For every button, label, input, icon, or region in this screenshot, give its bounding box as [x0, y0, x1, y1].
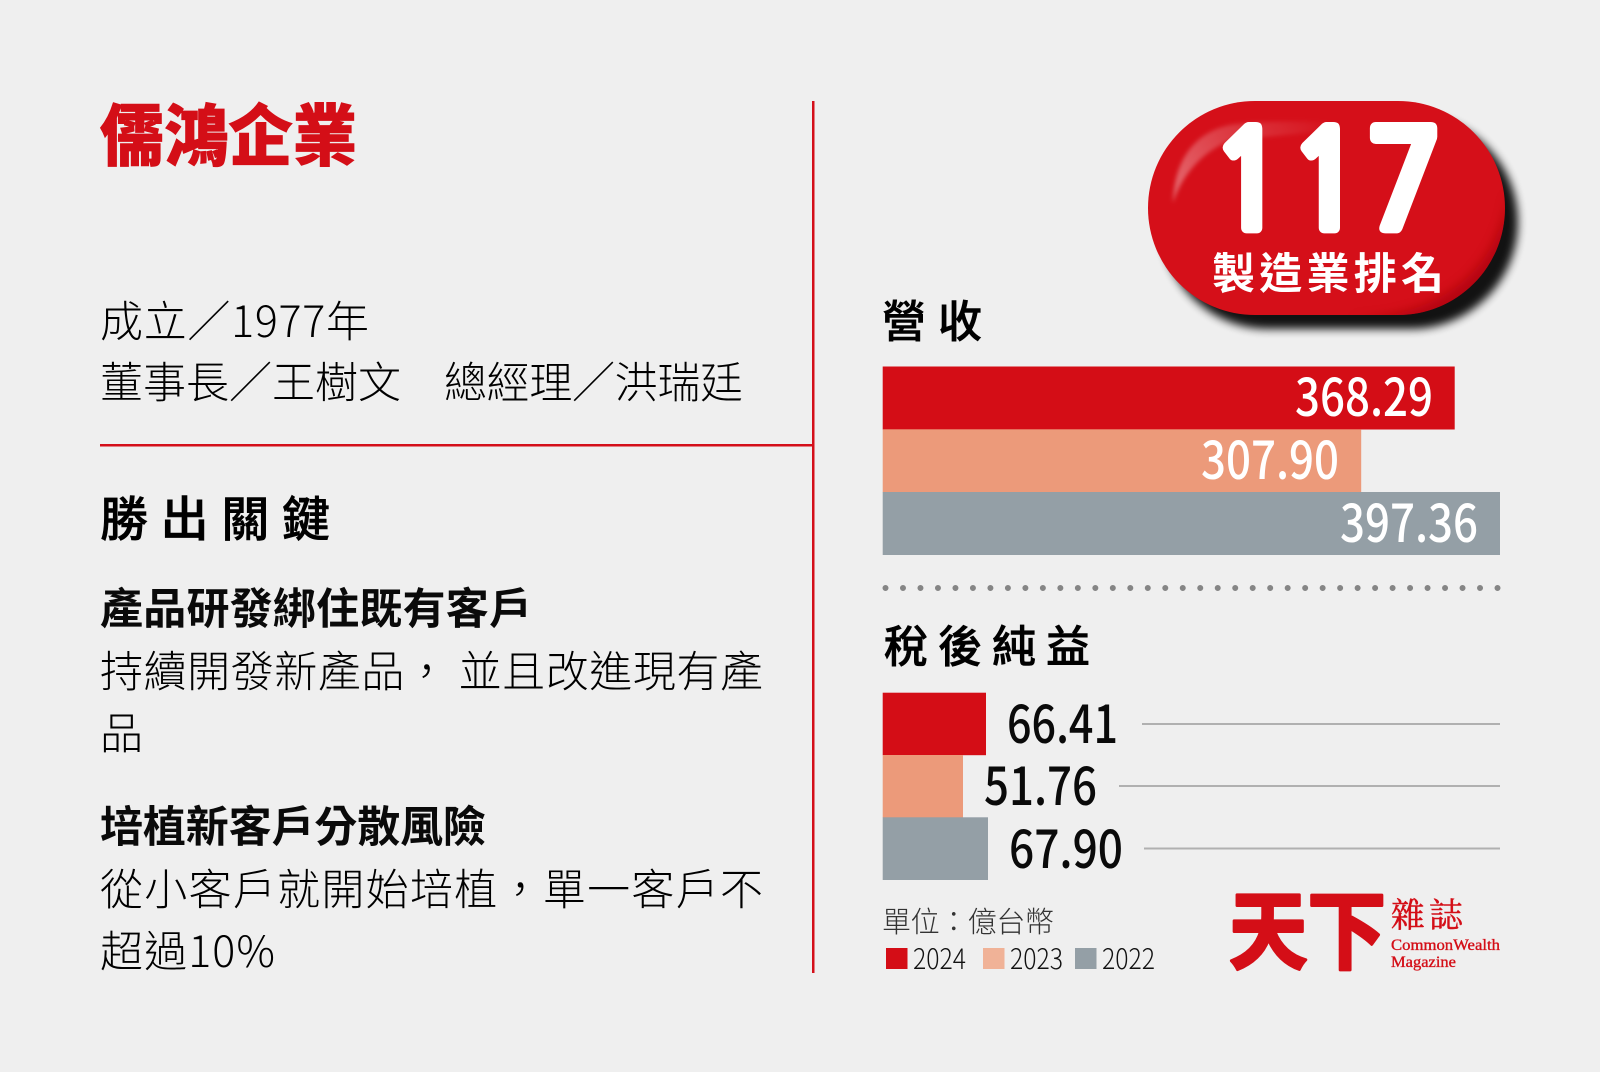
rank label: 製造業排名	[1212, 240, 1444, 302]
logo: CommonWealth Magazine: Magazine	[1391, 954, 1456, 971]
heading: net profit: 稅後純益	[884, 611, 1090, 675]
company facts: 總經理／洪瑞廷	[444, 349, 743, 411]
bar 2023: 51.76	[984, 745, 1097, 820]
bar 2024: 368.29	[1295, 356, 1433, 431]
badge pill	[1148, 101, 1505, 315]
key point 2: 超過10%	[100, 918, 275, 980]
horizontal divider	[100, 444, 814, 446]
bar 2022: 67.90	[1009, 808, 1123, 883]
bar 2023	[883, 745, 1500, 820]
bar 2022: 397.36	[1340, 482, 1478, 557]
key point 1	[100, 575, 763, 762]
key point 1: 產品研發綁住既有客戶	[100, 575, 532, 637]
logo: CommonWealth Magazine: 天下	[1229, 862, 1386, 987]
company facts: 成立／1977年	[100, 288, 369, 350]
legend	[886, 938, 1155, 978]
company facts: 董事長／王樹文	[100, 349, 401, 411]
key point 1: 品	[100, 700, 143, 762]
rank badge	[1148, 101, 1518, 330]
legend 2023: 2023	[1010, 938, 1063, 978]
company facts	[100, 288, 743, 411]
title: company name: 儒鴻企業	[100, 83, 357, 180]
bar 2023: 307.90	[1201, 419, 1339, 494]
key point 2	[100, 793, 763, 980]
logo: CommonWealth Magazine	[1229, 862, 1500, 987]
bar 2023	[883, 419, 1361, 494]
net profit bar chart	[883, 683, 1500, 883]
badge highlight	[1173, 121, 1353, 203]
key point 2: 從小客戶就開始培植，單一客戶不	[100, 856, 763, 918]
rank number: 117	[1210, 116, 1443, 250]
bar 2022	[883, 482, 1500, 557]
vertical divider	[812, 101, 814, 973]
bar 2024: 66.41	[1007, 683, 1118, 758]
legend 2023	[983, 938, 1063, 978]
heading: keys to winning: 勝出關鍵	[100, 480, 330, 550]
legend 2022: 2022	[1102, 938, 1155, 978]
bar 2022	[883, 808, 1500, 883]
badge shadow	[1161, 115, 1518, 329]
key point 1: 持續開發新產品， 並且改進現有產	[100, 638, 763, 700]
legend 2024	[886, 938, 966, 978]
revenue bar chart	[883, 356, 1500, 557]
legend 2022	[1075, 938, 1155, 978]
bar 2024	[883, 683, 1500, 758]
logo: CommonWealth Magazine: CommonWealth	[1391, 937, 1500, 954]
key point 2: 培植新客戶分散風險	[100, 793, 486, 855]
bar 2024	[883, 356, 1455, 431]
heading: revenue: 營收	[882, 286, 982, 350]
logo: CommonWealth Magazine: 雜誌	[1391, 888, 1464, 937]
unit note: 單位：億台幣	[882, 899, 1054, 941]
legend 2024: 2024	[913, 938, 966, 978]
badge shading	[1379, 211, 1504, 315]
